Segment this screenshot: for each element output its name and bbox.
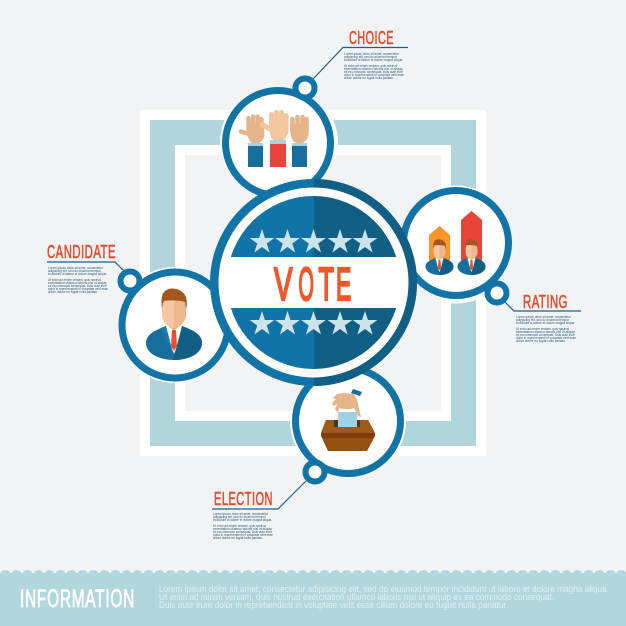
panel: vote badge bbox=[210, 179, 417, 386]
icon: ballot box bbox=[321, 389, 375, 451]
choice body text: Lorem ipsum dolor sit amet, consectetur bbox=[344, 52, 400, 56]
vote title bbox=[274, 258, 351, 311]
candidate connector bbox=[47, 262, 124, 271]
vote title: T bbox=[318, 258, 334, 310]
panel: election bbox=[212, 368, 400, 540]
choice body text bbox=[344, 52, 404, 80]
election body text: cillum dolore eu fugiat nulla pariatur. bbox=[213, 536, 263, 540]
choice body text: Ut enim ad minim veniam, quis nostrud bbox=[344, 64, 397, 68]
footer body text bbox=[159, 584, 609, 610]
candidate body text: exercitation ullamco laboris nisi ut aliquip bbox=[48, 281, 107, 285]
footer body text: Lorem ipsum dolor sit amet, consectetur adipisicing elit, sed do eiusmod tempor incididunt ut labore et dolore magna aliqua. bbox=[159, 584, 609, 594]
rating body text: dolor in reprehenderit in voluptate velit esse bbox=[516, 336, 576, 340]
election body text bbox=[213, 512, 273, 540]
rating body text: Ut enim ad minim veniam, quis nostrud bbox=[516, 327, 569, 331]
rating body text bbox=[516, 315, 576, 343]
rating body text: exercitation ullamco laboris nisi ut aliquip bbox=[516, 330, 575, 334]
election body text: Ut enim ad minim veniam, quis nostrud bbox=[213, 524, 266, 528]
candidate title: CANDIDATE bbox=[47, 241, 116, 262]
icon: left candidate bbox=[426, 239, 454, 275]
candidate small ring bbox=[120, 272, 140, 290]
candidate body text: Ut enim ad minim veniam, quis nostrud bbox=[48, 278, 101, 282]
footer heading: INFORMATION bbox=[20, 585, 135, 613]
vote title: O bbox=[298, 258, 314, 310]
square frame bbox=[140, 110, 486, 456]
candidate body text: ex ea commodo consequat. Duis aute irure bbox=[48, 284, 107, 288]
badge top and bottom bands bbox=[230, 196, 396, 369]
election body text: incididunt ut labore et dolore magna aliqua. bbox=[213, 518, 272, 522]
candidate body text bbox=[48, 266, 108, 294]
choice body text: cillum dolore eu fugiat nulla pariatur. bbox=[344, 76, 394, 80]
panel: choice bbox=[226, 27, 408, 196]
election body text: dolor in reprehenderit in voluptate velit esse bbox=[213, 533, 273, 537]
rating body text: Lorem ipsum dolor sit amet, consectetur bbox=[516, 315, 572, 319]
election body text: adipiscing elit, sed do eiusmod tempor bbox=[213, 515, 267, 519]
candidate body text: adipiscing elit, sed do eiusmod tempor bbox=[48, 269, 102, 273]
choice title: CHOICE bbox=[349, 27, 394, 48]
icon: right candidate bbox=[458, 239, 486, 275]
footer body text: Duis aute irure dolor in reprehenderit in voluptate velit esse cillum dolore eu fugiat nulla pariatur. bbox=[159, 600, 508, 610]
choice connector bbox=[313, 48, 408, 79]
choice small ring bbox=[296, 78, 314, 98]
election title: ELECTION bbox=[214, 488, 273, 509]
election connector bbox=[212, 481, 306, 509]
icon: rating arrows bbox=[429, 211, 482, 262]
election body text: ex ea commodo consequat. Duis aute irure bbox=[213, 530, 272, 534]
choice body text: adipiscing elit, sed do eiusmod tempor bbox=[344, 55, 398, 59]
election body text: Lorem ipsum dolor sit amet, consectetur bbox=[213, 512, 269, 516]
election body text: exercitation ullamco laboris nisi ut aliquip bbox=[213, 527, 272, 531]
choice circle bbox=[226, 90, 330, 196]
bottom stars bbox=[250, 311, 377, 335]
candidate circle bbox=[122, 272, 228, 378]
icon: candidate person bbox=[146, 289, 202, 360]
icon: raised hands bbox=[241, 112, 308, 167]
top stars bbox=[250, 229, 377, 253]
candidate body text: incididunt ut labore et dolore magna aliqua. bbox=[48, 272, 107, 276]
election circle bbox=[296, 368, 400, 474]
choice body text: ex ea commodo consequat. Duis aute irure bbox=[344, 70, 403, 74]
election small ring bbox=[306, 462, 324, 482]
vote title: V bbox=[274, 260, 293, 311]
rating body text: ex ea commodo consequat. Duis aute irure bbox=[516, 333, 575, 337]
rating body text: adipiscing elit, sed do eiusmod tempor bbox=[516, 318, 570, 322]
footer body text: Ut enim ad minim veniam, quis nostrud exercitation ullamco laboris nisi ut aliquip ex ea commodo consequat. bbox=[159, 592, 554, 602]
rating body text: cillum dolore eu fugiat nulla pariatur. bbox=[516, 339, 566, 343]
panel: rating bbox=[404, 190, 581, 343]
candidate body text: Lorem ipsum dolor sit amet, consectetur bbox=[48, 266, 104, 270]
choice body text: exercitation ullamco laboris nisi ut aliquip bbox=[344, 67, 403, 71]
choice body text: dolor in reprehenderit in voluptate velit esse bbox=[344, 73, 404, 77]
candidate body text: dolor in reprehenderit in voluptate velit esse bbox=[48, 287, 108, 291]
choice body text: incididunt ut labore et dolore magna aliqua. bbox=[344, 58, 403, 62]
panel: candidate bbox=[47, 241, 228, 378]
rating circle bbox=[404, 190, 508, 296]
rating connector bbox=[505, 302, 581, 311]
footer scalloped band bbox=[0, 570, 626, 626]
candidate body text: cillum dolore eu fugiat nulla pariatur. bbox=[48, 290, 98, 294]
badge outer ring bbox=[210, 179, 417, 386]
vote title: E bbox=[336, 258, 351, 310]
rating small ring bbox=[488, 284, 506, 302]
rating title: RATING bbox=[523, 291, 568, 312]
rating body text: incididunt ut labore et dolore magna aliqua. bbox=[516, 321, 575, 325]
panel: information footer bbox=[0, 570, 626, 626]
